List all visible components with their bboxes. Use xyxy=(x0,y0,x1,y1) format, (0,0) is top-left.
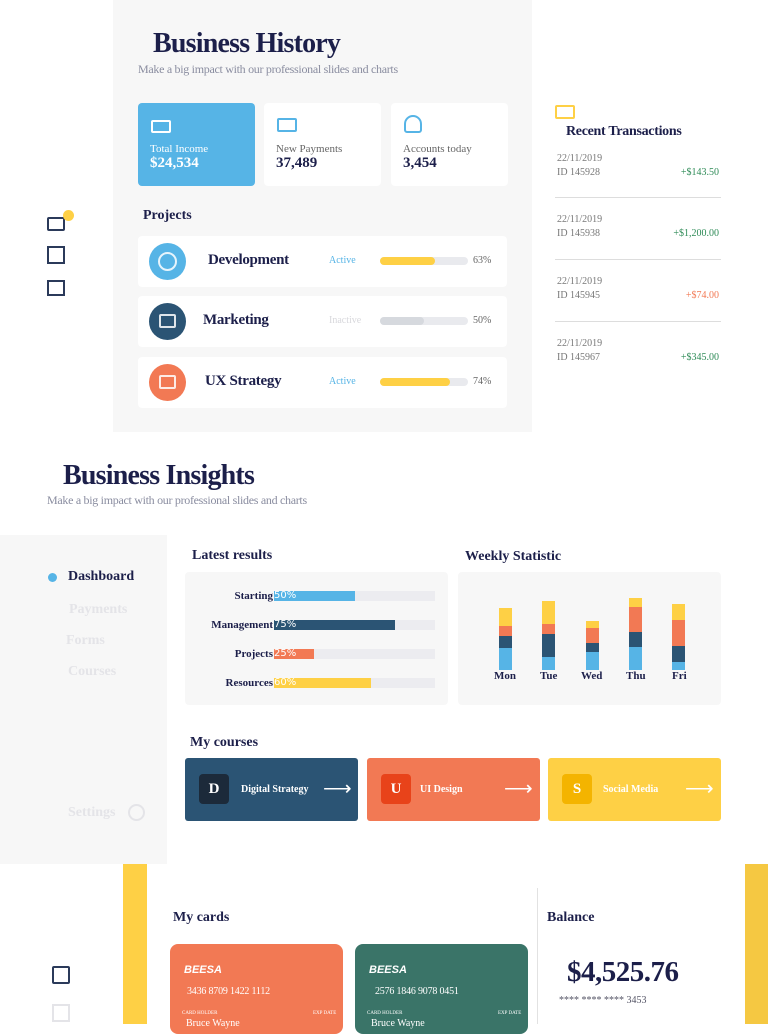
course: digital strategy: ⟶ xyxy=(323,778,352,800)
recent transactions: 22/11/2019 xyxy=(557,153,602,164)
sidebar menu: Dashboard xyxy=(68,569,134,584)
chart: weekly statistic stacked bars: Thu xyxy=(626,670,646,682)
card: green: Bruce Wayne xyxy=(371,1018,425,1029)
chart: weekly statistic stacked bars: Wed xyxy=(581,670,602,682)
sidebar menu: Courses xyxy=(68,664,116,679)
balance: $4,525.76 xyxy=(567,956,678,988)
sidebar menu: Payments xyxy=(69,602,127,617)
balance xyxy=(547,910,678,1006)
yellow stripes xyxy=(123,864,147,1024)
sidebar menu: Settings xyxy=(68,805,115,820)
stat: total income: Total Income xyxy=(150,143,208,155)
heading: my courses: My courses xyxy=(190,735,258,750)
recent transactions: +$74.00 xyxy=(686,290,719,301)
card: green: 2576 1846 9078 0451 xyxy=(375,986,459,997)
card: green: CARD HOLDER xyxy=(367,1011,402,1016)
project: marketing: 50% xyxy=(473,315,491,326)
chart: latest results: 25% xyxy=(274,648,296,659)
recent transactions: ID 145967 xyxy=(557,352,600,363)
icon: cards xyxy=(277,118,297,132)
balance: Balance xyxy=(547,910,594,925)
subtitle insights: Make a big impact with our professional slides and charts xyxy=(47,493,307,507)
chart: latest results: 60% xyxy=(274,677,296,688)
chart: latest results: 50% xyxy=(274,590,296,601)
project: development: Active xyxy=(329,255,356,266)
chart: latest results: Resources xyxy=(226,677,273,689)
sidebar menu xyxy=(0,535,167,864)
project: development: Development xyxy=(208,252,289,268)
heading: my cards: My cards xyxy=(173,910,229,925)
project: ux strategy: Active xyxy=(329,376,356,387)
course: ui design: U xyxy=(391,781,401,797)
stat: total income xyxy=(138,103,255,186)
recent transactions: ID 145928 xyxy=(557,167,600,178)
project: marketing: Inactive xyxy=(329,315,361,326)
heading: weekly statistic: Weekly Statistic xyxy=(465,549,561,564)
course: ui design: ⟶ xyxy=(504,778,533,800)
sidebar menu: Forms xyxy=(66,633,105,648)
recent transactions: +$345.00 xyxy=(681,352,719,363)
recent transactions: 22/11/2019 xyxy=(557,214,602,225)
chart: latest results: Starting xyxy=(234,590,273,602)
recent transactions: +$143.50 xyxy=(681,167,719,178)
project: development xyxy=(138,236,507,287)
course: ui design xyxy=(367,758,540,821)
project: marketing xyxy=(138,296,507,347)
project: ux strategy xyxy=(138,357,507,408)
title: business insights: Business Insights xyxy=(63,460,254,491)
course: digital strategy: Digital Strategy xyxy=(241,784,308,795)
course: social media xyxy=(548,758,721,821)
balance: **** **** **** 3453 xyxy=(559,995,646,1006)
recent transactions: ID 145945 xyxy=(557,290,600,301)
course: social media: ⟶ xyxy=(685,778,714,800)
recent transactions: ID 145938 xyxy=(557,228,600,239)
stat: accounts today: Accounts today xyxy=(403,143,472,155)
stat: total income: $24,534 xyxy=(150,155,199,171)
recent transactions: 22/11/2019 xyxy=(557,338,602,349)
chart: latest results: 75% xyxy=(274,619,296,630)
chart: weekly statistic stacked bars: Tue xyxy=(540,670,557,682)
sidebar icons top xyxy=(47,210,74,296)
subtitle: Make a big impact with our professional slides and charts xyxy=(138,62,398,76)
chart: weekly statistic stacked bars: Mon xyxy=(494,670,516,682)
project: development: 63% xyxy=(473,255,491,266)
project: ux strategy: 74% xyxy=(473,376,491,387)
stat: accounts today: 3,454 xyxy=(403,155,437,171)
recent transactions: 22/11/2019 xyxy=(557,276,602,287)
stat: new payments: New Payments xyxy=(276,143,342,155)
heading: latest results: Latest results xyxy=(192,548,272,563)
chart: latest results: Management xyxy=(211,619,273,631)
heading: projects: Projects xyxy=(143,208,192,223)
recent transactions: Recent Transactions xyxy=(566,124,682,139)
project: ux strategy: UX Strategy xyxy=(205,373,281,389)
title: Business History xyxy=(153,28,340,59)
card: green: EXP DATE xyxy=(498,1011,521,1016)
stat: accounts today xyxy=(391,103,508,186)
chart: latest results xyxy=(185,572,448,705)
card: orange xyxy=(170,944,343,1034)
icon: money xyxy=(151,120,171,133)
recent transactions: +$1,200.00 xyxy=(673,228,719,239)
chart: latest results: Projects xyxy=(235,648,273,660)
course: social media: S xyxy=(573,781,581,797)
recent transactions xyxy=(555,105,721,363)
course: social media: Social Media xyxy=(603,784,658,795)
course: digital strategy xyxy=(185,758,358,821)
project: marketing: Marketing xyxy=(203,312,269,328)
card: orange: Bruce Wayne xyxy=(186,1018,240,1029)
course: ui design: UI Design xyxy=(420,784,463,795)
course: digital strategy: D xyxy=(209,781,219,797)
stat: new payments: 37,489 xyxy=(276,155,317,171)
card: green xyxy=(355,944,528,1034)
bottom sidebar icons xyxy=(52,966,70,1022)
panel: business history xyxy=(113,0,532,432)
card: orange: EXP DATE xyxy=(313,1011,336,1016)
card: orange: BEESA xyxy=(184,964,222,976)
icon: users xyxy=(404,115,422,133)
card: orange: 3436 8709 1422 1112 xyxy=(187,986,270,997)
chart: weekly statistic stacked bars xyxy=(458,572,721,705)
card: orange: CARD HOLDER xyxy=(182,1011,217,1016)
chart: weekly statistic stacked bars: Fri xyxy=(672,670,687,682)
stat: new payments xyxy=(264,103,381,186)
card: green: BEESA xyxy=(369,964,407,976)
